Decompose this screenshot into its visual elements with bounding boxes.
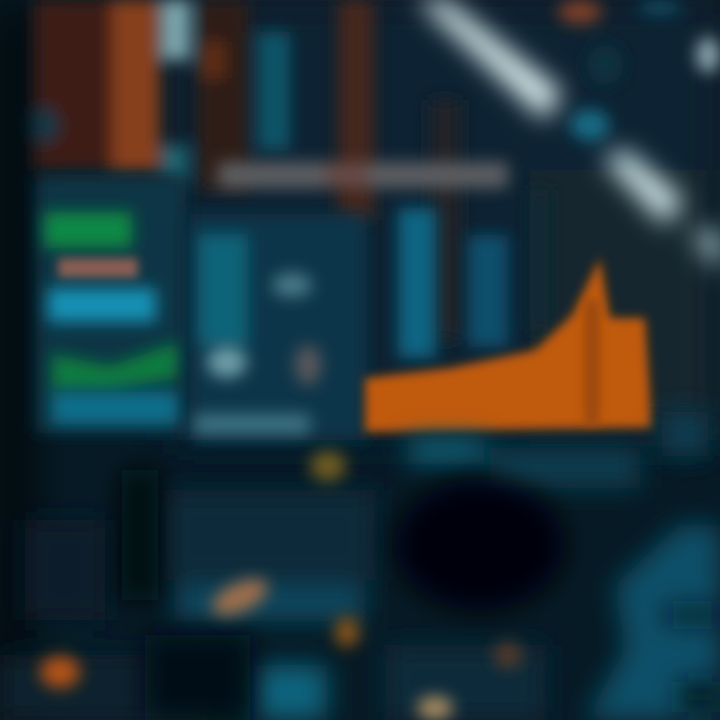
orange area chart	[365, 258, 652, 432]
panel body	[190, 214, 366, 440]
rose spot	[295, 345, 321, 385]
teal chart bars	[398, 208, 508, 358]
lower cyan block	[52, 392, 178, 424]
cyan block	[48, 288, 156, 322]
monitor body	[36, 175, 186, 433]
diagonal light streak	[418, 0, 720, 272]
teal column	[198, 234, 248, 346]
small orange highlights	[40, 451, 522, 720]
left monitor panel	[36, 175, 186, 433]
top vertical bars	[31, 0, 720, 340]
rose block	[58, 258, 138, 278]
pale spot upper	[272, 273, 312, 297]
green wave block	[52, 342, 178, 390]
green block	[44, 212, 132, 248]
right monitor panel	[190, 214, 366, 440]
pale bottom strip	[194, 414, 310, 434]
black shadow shape	[122, 470, 720, 720]
heading band	[218, 162, 508, 188]
pale spot lower	[207, 346, 247, 378]
lower teal shapes	[0, 412, 720, 720]
